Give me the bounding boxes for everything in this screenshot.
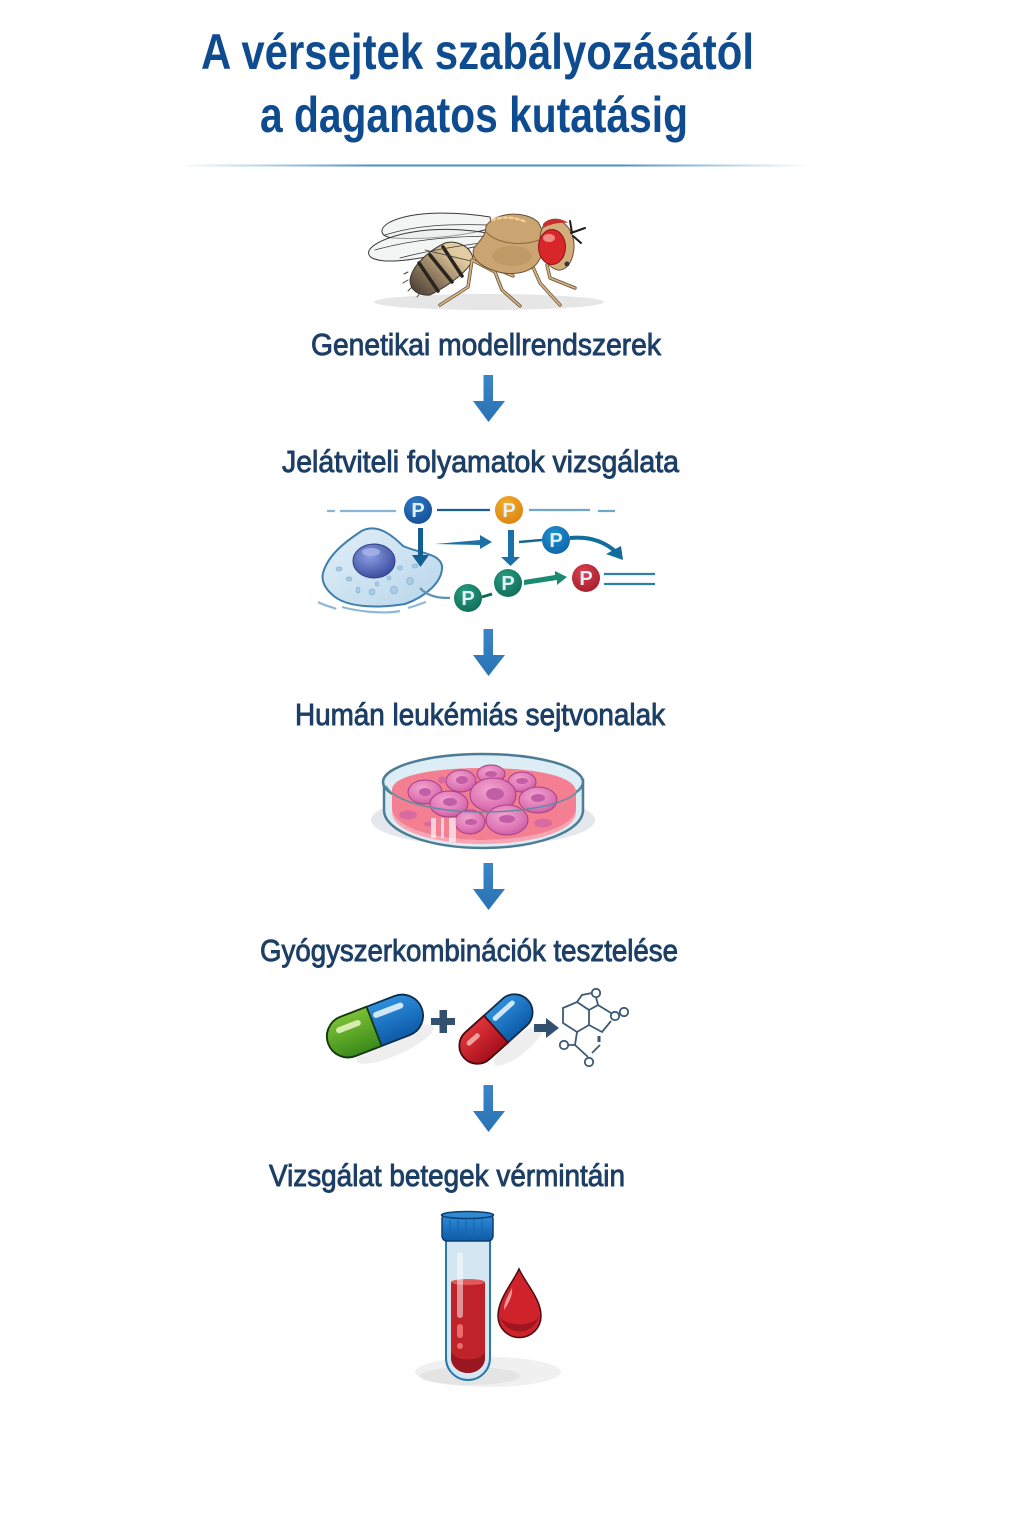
icon: petri dish: [371, 754, 595, 848]
title: A vérsejtek szabályozásától: [201, 24, 754, 80]
title: [201, 24, 754, 143]
arrow to molecule: [534, 1018, 559, 1038]
pill: green and blue: [321, 988, 438, 1071]
drug combination icons: [321, 987, 628, 1072]
label: patient samples: Vizsgálat betegek vérmintáin: [269, 1158, 625, 1193]
test tube: [442, 1212, 494, 1380]
arrows: [412, 528, 623, 597]
glass glare: [431, 818, 456, 842]
title: a daganatos kutatásig: [260, 87, 688, 143]
abdomen: [400, 240, 505, 297]
molecule: [560, 989, 628, 1066]
label: drug combinations: Gyógyszerkombinációk tesztelése: [260, 933, 678, 968]
label: signalling: Jelátviteli folyamatok vizsgálata: [282, 444, 680, 479]
eye: [538, 230, 566, 264]
icon: blood tube and drop: [415, 1212, 561, 1387]
phospho nodes: P: [461, 588, 475, 610]
phospho nodes: P: [501, 573, 515, 595]
label: genetic models: Genetikai modellrendszerek: [311, 327, 661, 362]
arrow 1: [473, 375, 505, 422]
phospho nodes: P: [411, 500, 425, 522]
icon: fruit fly: [369, 213, 604, 310]
wings: [369, 213, 507, 261]
phospho nodes: P: [502, 500, 516, 522]
arrow 2: [473, 629, 505, 676]
phospho nodes: P: [549, 530, 563, 552]
pill: red and blue: [452, 987, 547, 1072]
arrow 4: [473, 1085, 505, 1132]
blood drop: [498, 1269, 541, 1338]
arrow 3: [473, 863, 505, 910]
signalling pathway diagram: [318, 496, 655, 612]
legs: [440, 260, 575, 306]
thorax: [473, 214, 544, 274]
phospho nodes: P: [579, 568, 593, 590]
phospho nodes: [404, 496, 600, 612]
cells: [399, 765, 557, 835]
head: [540, 220, 574, 270]
label: leukemia lines: Humán leukémiás sejtvonalak: [295, 697, 665, 732]
signalling lines: [327, 510, 655, 584]
icon: plus: [431, 1010, 455, 1033]
cell: [318, 528, 450, 612]
